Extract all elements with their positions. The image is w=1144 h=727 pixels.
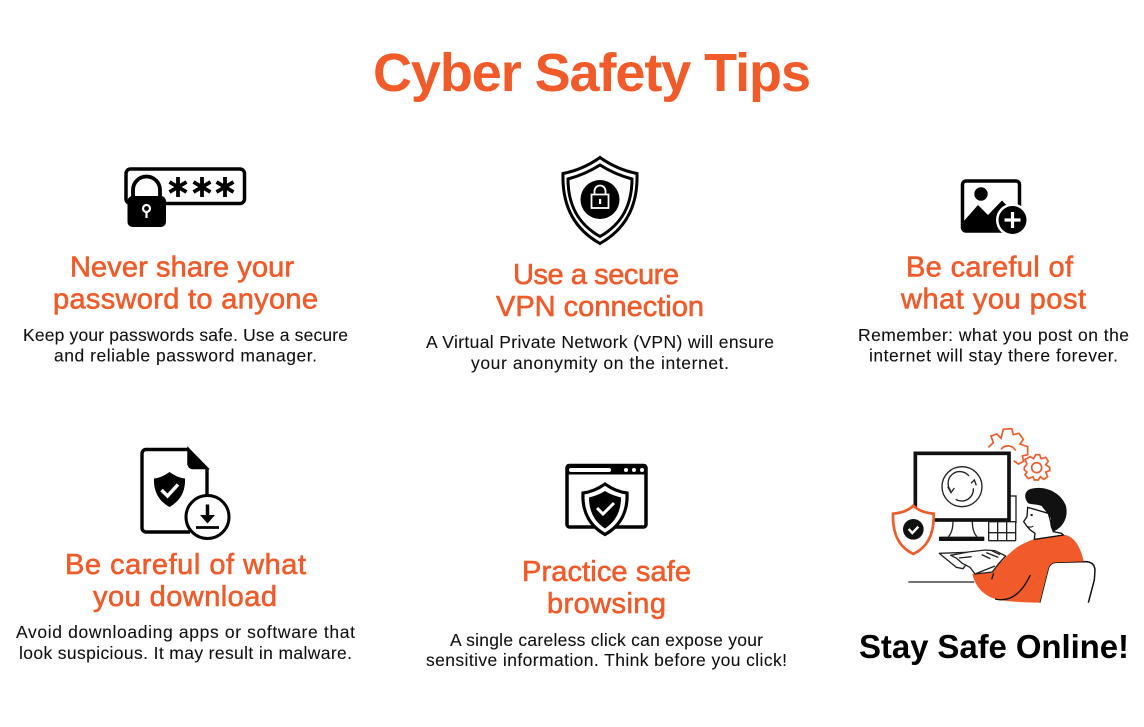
- desk line: [908, 580, 974, 584]
- chair: [1040, 562, 1095, 603]
- heading: Practice safe: [522, 556, 691, 588]
- head: [1024, 488, 1067, 539]
- heading: [496, 259, 704, 323]
- icon: computer tower: [989, 496, 1016, 541]
- icon: document with shield and download: [142, 448, 229, 538]
- text block: Avoid downloading apps or software that: [16, 622, 355, 642]
- text block: your anonymity on the internet.: [471, 353, 729, 373]
- heading: Be careful of what: [65, 549, 306, 581]
- icon: gears: [988, 429, 1050, 480]
- text block: A Virtual Private Network (VPN) will ensure: [426, 332, 774, 352]
- heading: Be careful of: [906, 252, 1074, 284]
- text block: A single careless click can expose your: [450, 630, 763, 650]
- keyboard and hands: [939, 550, 1006, 574]
- text block: [16, 622, 355, 663]
- icon: browser window with shield: [566, 464, 647, 534]
- heading: Use a secure: [513, 259, 679, 291]
- heading: password to anyone: [53, 284, 318, 316]
- heading: [900, 252, 1086, 316]
- heading: Stay Safe Online!: [859, 628, 1129, 665]
- icon: image with plus: [962, 181, 1029, 236]
- heading: what you post: [900, 284, 1086, 316]
- panel: practice safe browsing: [426, 464, 787, 670]
- text block: look suspicious. It may result in malware.: [19, 643, 352, 663]
- illustration: person at computer: [893, 429, 1095, 603]
- text block: internet will stay there forever.: [869, 346, 1118, 366]
- sweater: [972, 535, 1084, 603]
- icon: password field with padlock: [126, 169, 244, 227]
- panel: be careful of what you download: [16, 448, 355, 663]
- icon: orange shield with check: [893, 506, 934, 554]
- text block: sensitive information. Think before you click!: [426, 650, 787, 670]
- text block: [426, 630, 787, 670]
- text block: [426, 332, 774, 373]
- heading: you download: [93, 581, 277, 613]
- panel: be careful of what you post: [858, 181, 1129, 366]
- panel: never share your password: [23, 169, 348, 366]
- heading: [522, 556, 691, 620]
- icon: monitor: [915, 453, 1009, 541]
- panel: stay safe online illustration: [859, 429, 1129, 665]
- heading: Never share your: [70, 252, 294, 284]
- text block: [23, 325, 348, 366]
- icon: shield with lock: [563, 158, 637, 244]
- heading: [65, 549, 306, 613]
- heading: VPN connection: [496, 291, 704, 323]
- heading: [53, 252, 318, 316]
- text block: [858, 325, 1129, 366]
- title: Cyber Safety Tips: [373, 43, 811, 103]
- text block: Remember: what you post on the: [858, 325, 1129, 345]
- text block: and reliable password manager.: [54, 346, 317, 366]
- panel: use a secure VPN connection: [426, 158, 774, 373]
- heading: browsing: [547, 588, 666, 620]
- text block: Keep your passwords safe. Use a secure: [23, 325, 348, 345]
